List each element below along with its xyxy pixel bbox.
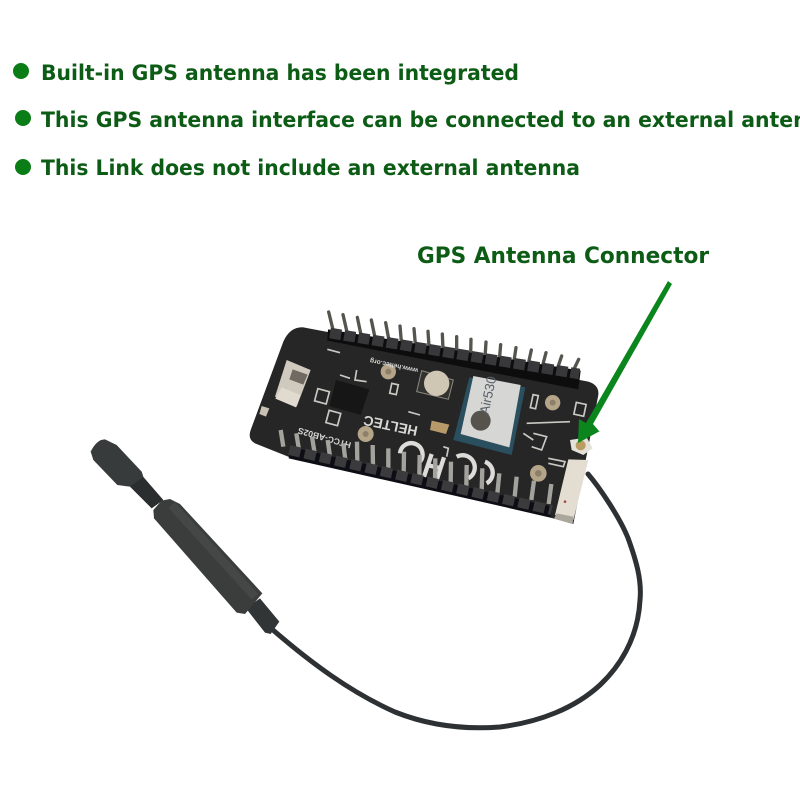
connector label: GPS Antenna Connector (417, 244, 709, 269)
antenna body (91, 439, 279, 634)
battery connector (275, 360, 311, 407)
GPS module (453, 375, 525, 455)
bullet 3: This Link does not include an external antenna (41, 156, 580, 181)
antenna cable (273, 474, 640, 728)
bottom header (289, 447, 552, 517)
chip (329, 380, 369, 415)
board outline (250, 327, 598, 524)
RF connector (570, 437, 593, 455)
silk pads (315, 349, 586, 467)
bullet list (13, 61, 800, 181)
bullet 1: Built-in GPS antenna has been integrated (41, 61, 519, 86)
screws (358, 364, 560, 482)
certification marks (400, 443, 493, 483)
GPS module: Air530 (477, 375, 499, 416)
crystal can (417, 371, 453, 399)
green arrow (578, 281, 672, 443)
silk text: www.heltec.org (369, 357, 420, 374)
top header (327, 329, 581, 389)
bottom pins (281, 430, 551, 504)
silk text: HTCC-AB02S (297, 426, 352, 450)
silk text: HELTEC (362, 412, 419, 439)
capacitor (430, 421, 449, 434)
ceramic antenna (554, 459, 588, 524)
top pins (329, 312, 579, 374)
silk text (297, 357, 420, 450)
circuit board (250, 312, 598, 524)
small capacitor (259, 406, 269, 417)
